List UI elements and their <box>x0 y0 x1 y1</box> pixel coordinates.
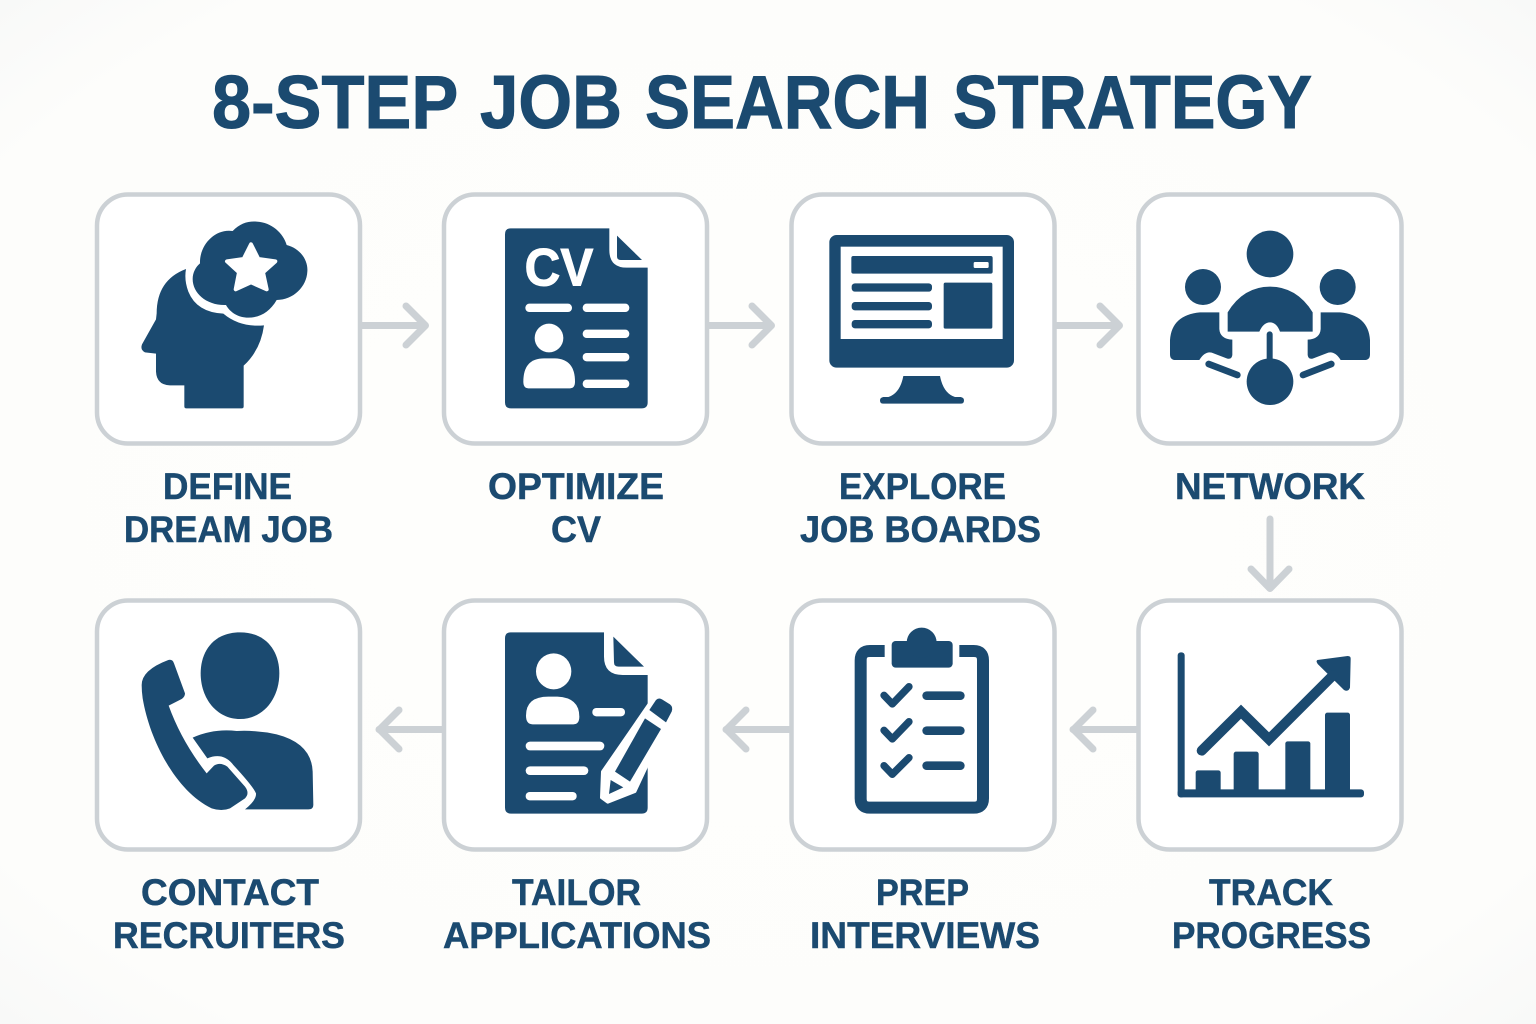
icon: person on phone <box>142 632 313 810</box>
arrow: step 2 to 3 <box>709 306 772 345</box>
label: explore job boards: JOB BOARDS <box>800 509 1041 550</box>
title: SEARCH <box>645 60 930 144</box>
arrow: step 4 to 5 <box>1251 519 1289 588</box>
icon: connected people network <box>1170 231 1370 405</box>
label: tailor applications <box>443 872 711 956</box>
label: define dream job <box>124 466 333 550</box>
title: JOB <box>480 60 622 144</box>
panel: contact recruiters <box>97 600 360 956</box>
icon: cv document <box>505 228 648 408</box>
label: optimize cv: CV <box>551 509 601 550</box>
label: explore job boards <box>800 466 1041 550</box>
title: 8-STEP <box>212 60 457 144</box>
label: track progress: TRACK <box>1209 872 1333 913</box>
label: tailor applications: TAILOR <box>512 872 641 913</box>
arrow: step 3 to 4 <box>1056 306 1120 345</box>
title: STRATEGY <box>953 60 1312 144</box>
label: prep interviews: INTERVIEWS <box>810 915 1040 956</box>
arrow: step 7 to 8 <box>379 710 442 749</box>
label: prep interviews: PREP <box>876 872 969 913</box>
arrow: step 6 to 7 <box>726 710 790 749</box>
icon: head with star cloud <box>141 222 307 408</box>
icon: clipboard checklist <box>861 628 983 808</box>
panel: network <box>1138 194 1402 507</box>
label: optimize cv <box>488 466 664 550</box>
label: tailor applications: APPLICATIONS <box>443 915 711 956</box>
icon: cv document: CV <box>525 239 593 298</box>
label: contact recruiters <box>113 872 345 956</box>
label: track progress <box>1172 872 1371 956</box>
panel: prep interviews <box>792 600 1054 956</box>
panel: optimize cv <box>444 194 707 550</box>
label: network: NETWORK <box>1175 466 1365 507</box>
label: contact recruiters: RECRUITERS <box>113 915 345 956</box>
panel: explore job boards <box>792 194 1054 550</box>
panel: tailor applications <box>443 600 711 956</box>
label: define dream job: DEFINE <box>163 466 292 507</box>
label: define dream job: DREAM JOB <box>124 509 333 550</box>
label: track progress: PROGRESS <box>1172 915 1371 956</box>
label: explore job boards: EXPLORE <box>839 466 1006 507</box>
panel: track progress <box>1138 600 1402 956</box>
icon: computer monitor job board <box>829 235 1014 404</box>
label: optimize cv: OPTIMIZE <box>488 466 664 507</box>
arrow: step 5 to 6 <box>1073 710 1137 749</box>
icon: rising bar chart <box>1178 652 1364 797</box>
icon: resume with pencil <box>505 632 674 814</box>
label: prep interviews <box>810 872 1040 956</box>
panel: define dream job <box>97 194 360 550</box>
arrow: step 1 to 2 <box>361 306 426 345</box>
label: contact recruiters: CONTACT <box>141 872 319 913</box>
